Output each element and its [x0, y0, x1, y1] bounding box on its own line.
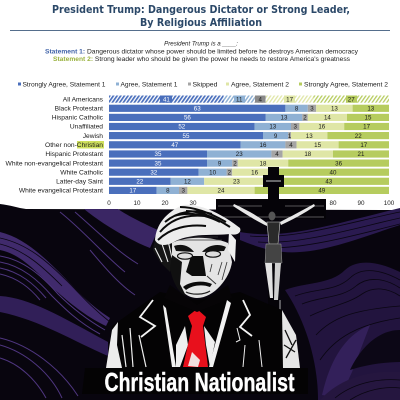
row: Latter-day Saint: [56, 178, 389, 186]
row: Black Protestant: 8: [295, 106, 299, 112]
row: Hispanic Catholic: 2: [303, 115, 307, 122]
row: White evangelical Protestant: [19, 187, 389, 195]
legend: Agree, Statement 2: [231, 82, 290, 88]
x axis: 40: [217, 200, 225, 207]
row: Hispanic Protestant: 4: [275, 151, 279, 158]
row: Hispanic Catholic: 14: [324, 115, 331, 122]
row: Jewish: 1: [288, 133, 292, 140]
row: Hispanic Catholic: 13: [281, 115, 288, 122]
row: All Americans: All Americans: [63, 96, 104, 103]
legend: Skipped: [192, 82, 218, 88]
row: White Catholic: 16: [251, 169, 259, 176]
row: Hispanic Protestant: 35: [155, 151, 162, 158]
row: Unaffiliated: Unaffiliated: [70, 124, 103, 131]
row: Black Protestant: 13: [367, 106, 375, 112]
row: Hispanic Protestant: [45, 150, 389, 158]
row: Latter-day Saint: 23: [233, 178, 240, 186]
row: White Catholic: 32: [150, 169, 158, 176]
row: Unaffiliated: 3: [293, 124, 297, 131]
legend: [18, 82, 389, 88]
row: Black Protestant: [55, 105, 389, 112]
row: Hispanic Protestant: 18: [304, 151, 312, 158]
illustration: Trump portrait: [106, 205, 300, 368]
row: Latter-day Saint: 43: [325, 178, 333, 186]
question and statements: President Trump is a ____:: [164, 40, 238, 48]
row: White evangelical Protestant: 49: [318, 188, 326, 195]
row: White Catholic: [60, 169, 389, 176]
row: Black Protestant: 3: [310, 106, 314, 112]
row: White Catholic: White Catholic: [60, 169, 104, 176]
row: Other non-Christian: Other non-Christian: [45, 142, 103, 149]
row: Other non-Christian: [45, 141, 389, 149]
x axis: 100: [384, 200, 395, 207]
x axis: 80: [329, 200, 337, 207]
row: Hispanic Catholic: 15: [365, 115, 372, 122]
banner: Christian Nationalist: Christian Nationalist: [104, 367, 295, 397]
hair: [155, 205, 240, 245]
row: All Americans: 17: [286, 96, 294, 103]
row: Jewish: 55: [183, 133, 190, 140]
x axis: 0: [107, 200, 111, 207]
tie: [183, 309, 208, 367]
row: White evangelical Protestant: 17: [129, 188, 137, 195]
row: Hispanic Protestant: Hispanic Protestant: [45, 151, 103, 158]
row: White non-evangelical Protestant: 9: [218, 160, 222, 167]
row: Hispanic Catholic: [52, 114, 389, 122]
x axis: 30: [189, 200, 197, 207]
row: Latter-day Saint: 22: [136, 178, 144, 186]
bar chart: [6, 96, 395, 207]
row: White non-evangelical Protestant: 2: [233, 160, 237, 167]
row: Black Protestant: 63: [194, 106, 201, 112]
row: All Americans: 4: [258, 96, 262, 103]
title: [52, 4, 350, 29]
face: [172, 238, 232, 298]
row: Latter-day Saint: 12: [184, 178, 191, 186]
row: White Catholic: 10: [209, 169, 217, 176]
row: Latter-day Saint: Latter-day Saint: [56, 178, 103, 186]
x axis: 90: [357, 200, 365, 207]
row: Hispanic Catholic: Hispanic Catholic: [52, 115, 104, 122]
question and statements: Statement 1: Dangerous dictator whose power should be limited before he destroys American democracy: [45, 48, 359, 56]
row: Unaffiliated: 13: [269, 124, 277, 131]
row: Other non-Christian: 17: [360, 142, 368, 149]
row: Other non-Christian: 4: [289, 142, 293, 149]
row: White evangelical Protestant: White evangelical Protestant: [19, 188, 103, 195]
x axis: [107, 200, 395, 207]
x axis: 60: [273, 200, 281, 207]
row: All Americans: 11: [236, 96, 243, 103]
row: Hispanic Catholic: 56: [184, 115, 191, 122]
legend: Agree, Statement 1: [120, 82, 178, 88]
legend: Strongly Agree, Statement 1: [22, 82, 106, 88]
row: Unaffiliated: [70, 123, 389, 131]
row: Jewish: 13: [306, 133, 313, 140]
row: Jewish: [83, 132, 389, 140]
row: Jewish: 22: [355, 133, 362, 140]
illustration: dark purple background: [0, 204, 400, 400]
row: White non-evangelical Protestant: 36: [335, 160, 343, 167]
question and statements: [45, 40, 359, 63]
row: White non-evangelical Protestant: 35: [155, 160, 162, 167]
row: White evangelical Protestant: 24: [218, 188, 225, 195]
row: Hispanic Protestant: 23: [236, 151, 243, 158]
row: Jewish: Jewish: [83, 133, 103, 140]
row: Other non-Christian: 16: [260, 142, 267, 149]
title: By Religious Affiliation: [140, 17, 262, 29]
row: White non-evangelical Protestant: 18: [260, 160, 267, 167]
row: Other non-Christian: 47: [171, 142, 179, 149]
row: Other non-Christian: 15: [314, 142, 322, 149]
x axis: 20: [161, 200, 169, 207]
row: All Americans: 41: [163, 96, 170, 103]
x axis: 10: [133, 200, 141, 207]
x axis: 70: [301, 200, 309, 207]
row: White Catholic: 2: [228, 169, 232, 176]
row: White evangelical Protestant: 8: [166, 188, 170, 195]
row: Unaffiliated: 16: [318, 124, 326, 131]
row: All Americans: [63, 96, 389, 103]
illustration: cross with crucifix: [216, 167, 326, 367]
title: President Trump: Dangerous Dictator or Strong Leader,: [52, 4, 350, 16]
row: White evangelical Protestant: 3: [181, 188, 185, 195]
row: Unaffiliated: 52: [178, 124, 186, 131]
row: Black Protestant: Black Protestant: [55, 106, 103, 112]
row: Unaffiliated: 17: [363, 124, 371, 131]
row: White Catholic: 40: [330, 169, 337, 176]
row: Black Protestant: 13: [331, 106, 338, 112]
crucified figure: [233, 204, 315, 300]
legend: Strongly Agree, Statement 2: [304, 82, 389, 88]
row: White non-evangelical Protestant: White non-evangelical Protestant: [6, 160, 103, 167]
question and statements: Statement 2: Strong leader who should be given the power he needs to restore America's greatness: [53, 56, 350, 63]
row: White non-evangelical Protestant: [6, 160, 389, 167]
row: Hispanic Protestant: 21: [358, 151, 365, 158]
row: All Americans: 27: [348, 96, 355, 103]
x axis: 50: [245, 200, 253, 207]
row: Jewish: 9: [274, 133, 278, 140]
